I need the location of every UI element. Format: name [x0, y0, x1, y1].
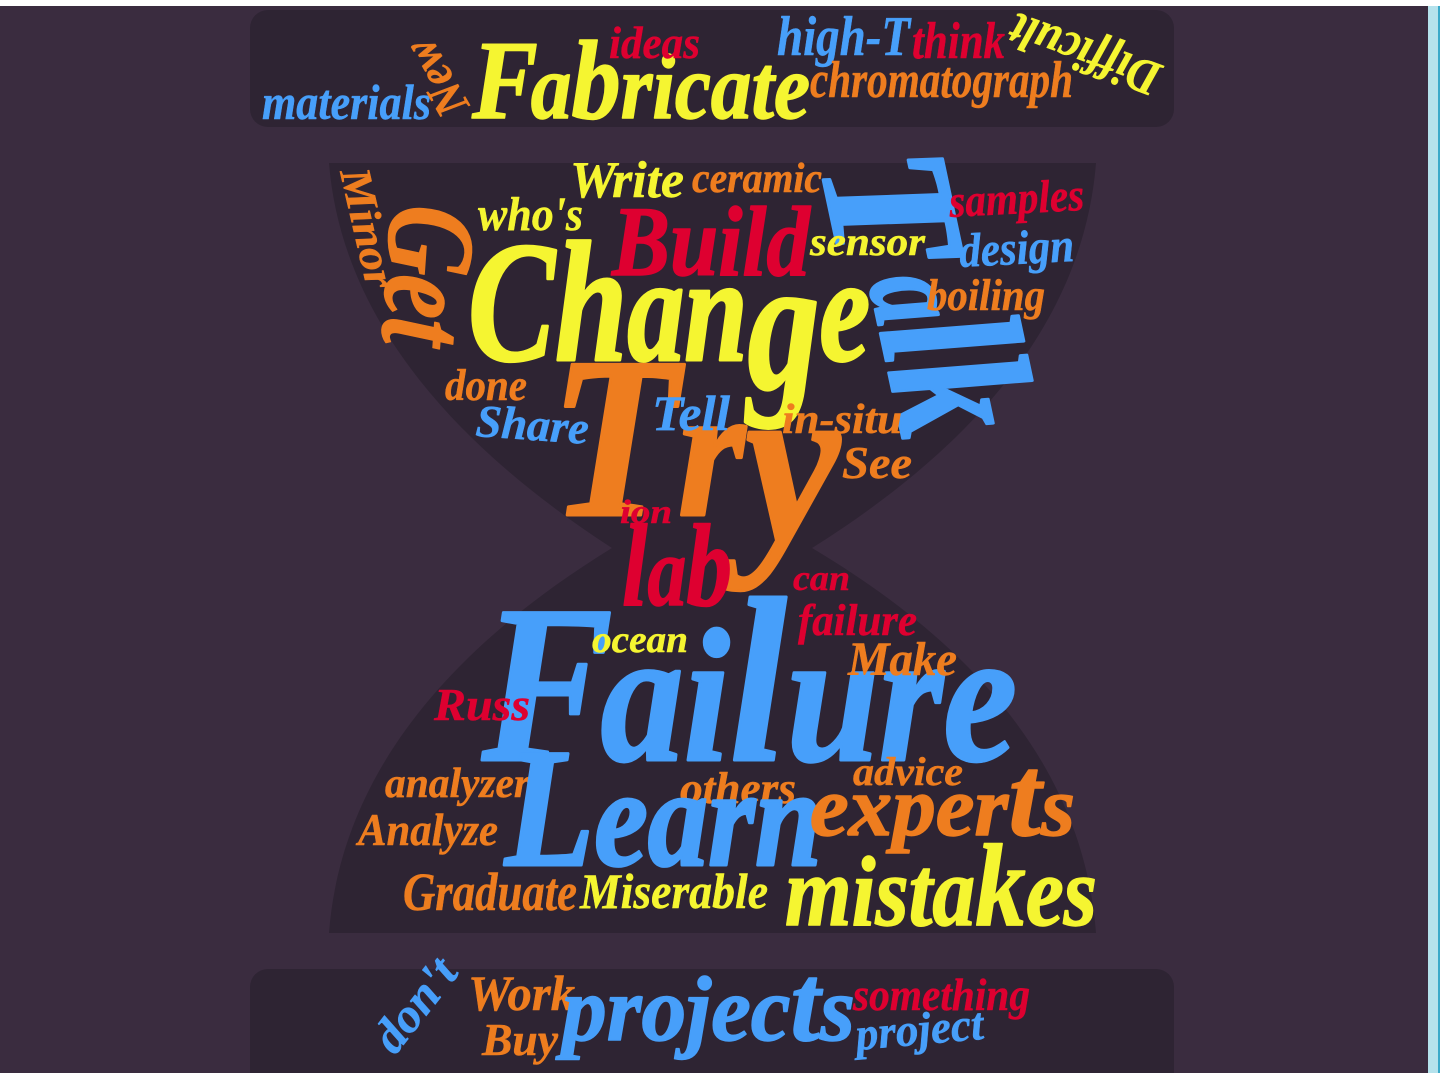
word: Try: Tr: [550, 310, 752, 565]
word: Graduate: Graduate: [403, 862, 577, 922]
word: analyzer: analyzer: [385, 761, 531, 807]
word: don't: don't: [362, 946, 469, 1063]
panel: top sand bar: [250, 2, 1174, 143]
word: Fabricate: Fabricate: [471, 19, 810, 143]
word: ocean: ocean: [592, 619, 688, 661]
right edge band: [1428, 6, 1440, 1073]
word: Learn: Learn: [503, 714, 822, 902]
word: Get: Get: [354, 201, 502, 353]
word: experts: experts: [810, 733, 1075, 860]
word: materials: materials: [262, 74, 431, 130]
word: design: design: [958, 219, 1075, 278]
panel: hourglass: [329, 123, 1097, 951]
word: advice: advice: [853, 749, 963, 794]
word: something: something: [852, 969, 1030, 1020]
word: failure: failure: [798, 596, 917, 645]
word: Russ: Russ: [433, 679, 530, 730]
word: ceramic: ceramic: [692, 156, 822, 202]
word: New: New: [393, 29, 480, 127]
word: samples: samples: [947, 169, 1085, 227]
word: high-T: high-T: [777, 6, 912, 68]
panel: bottom sand bar: [250, 942, 1174, 1073]
word: Minor: Minor: [330, 162, 406, 294]
word: Write: Write: [570, 152, 684, 209]
word: Change: Chan: [468, 208, 786, 398]
word: boiling: boiling: [927, 271, 1045, 320]
word: Failure: Failure: [481, 551, 1017, 811]
word: projects: projects: [555, 942, 855, 1064]
word: Miserable: Miserable: [579, 863, 768, 919]
word: Make: Make: [847, 633, 957, 686]
word: done: done: [445, 361, 527, 410]
word: mistakes: mistakes: [785, 820, 1097, 951]
word: Analyze: Analyze: [355, 804, 498, 855]
word: in-situ: in-situ: [782, 397, 902, 443]
word: Talk: T: [780, 131, 1005, 291]
word: Work: Work: [468, 965, 575, 1021]
word: ideas: ideas: [609, 17, 700, 68]
word: Try: y: [723, 331, 841, 591]
word: Talk: alk: [837, 258, 1082, 477]
word: Buy: Buy: [481, 1014, 559, 1065]
word: can: can: [793, 558, 850, 598]
word: Tell: Tell: [652, 385, 730, 441]
word: project: project: [850, 998, 987, 1060]
word: Change: g: [745, 220, 820, 430]
word: Build: Build: [611, 186, 812, 297]
word: See: See: [842, 437, 912, 488]
word: Share: Share: [474, 395, 591, 454]
word: think: think: [912, 13, 1005, 70]
word: others: others: [680, 764, 796, 813]
word: who's: who's: [478, 188, 583, 241]
word: ion: ion: [620, 494, 672, 531]
word: sensor: sensor: [809, 219, 925, 264]
word: Change: e: [820, 227, 870, 393]
word: lab: lab: [622, 500, 732, 631]
word: chromatograph: chromatograph: [810, 52, 1073, 109]
